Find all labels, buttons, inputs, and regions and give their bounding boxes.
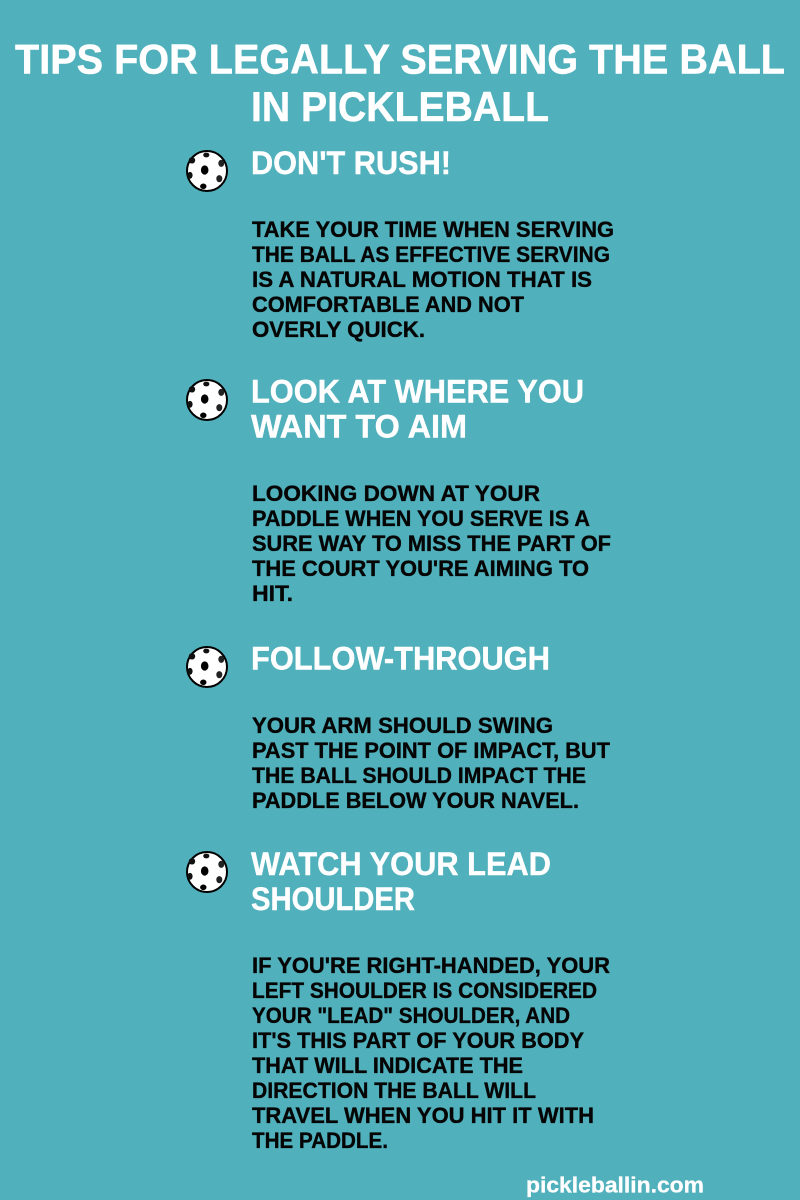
footer: source website: pickleballin.com <box>526 1172 704 1198</box>
text block: don't rush: TAKE YOUR TIME WHEN SERVING <box>252 217 614 242</box>
heading: look at where you want to aim <box>251 374 584 444</box>
text block: watch your lead shoulder: LEFT SHOULDER IS CONSIDERED <box>252 978 597 1003</box>
text block: watch your lead shoulder: DIRECTION THE BALL WILL <box>252 1078 536 1103</box>
heading: watch your lead shoulder <box>251 846 551 917</box>
text block: don't rush: IS A NATURAL MOTION THAT IS <box>252 267 592 292</box>
panel: look at where you want to aim <box>187 374 611 606</box>
panel: don't rush <box>187 145 614 342</box>
text block: look at where you want to aim: SURE WAY TO MISS THE PART OF <box>252 531 611 556</box>
icon: pickleball <box>187 647 227 687</box>
text block: watch your lead shoulder <box>252 953 610 1153</box>
text block: follow-through: PAST THE POINT OF IMPACT, BUT <box>252 738 611 763</box>
text block: look at where you want to aim: PADDLE WHEN YOU SERVE IS A <box>252 506 590 531</box>
icon: pickleball <box>187 380 227 420</box>
text block: look at where you want to aim: HIT. <box>252 581 293 606</box>
title <box>15 36 785 130</box>
text block: don't rush: THE BALL AS EFFECTIVE SERVING <box>252 242 610 267</box>
icon: pickleball <box>187 151 227 191</box>
text block: watch your lead shoulder: IT'S THIS PART OF YOUR BODY <box>252 1028 584 1053</box>
heading: don't rush: DON'T RUSH! <box>251 145 451 181</box>
text block: don't rush: COMFORTABLE AND NOT <box>252 292 525 317</box>
text block: watch your lead shoulder: THAT WILL INDICATE THE <box>252 1053 523 1078</box>
text block: look at where you want to aim: THE COURT YOU'RE AIMING TO <box>252 556 589 581</box>
text block: don't rush <box>252 217 614 342</box>
heading: look at where you want to aim: LOOK AT WHERE YOU <box>251 374 584 410</box>
panel: watch your lead shoulder <box>187 846 610 1153</box>
text block: follow-through: THE BALL SHOULD IMPACT THE <box>252 763 586 788</box>
text block: look at where you want to aim <box>252 481 611 606</box>
text block: watch your lead shoulder: TRAVEL WHEN YOU HIT IT WITH <box>252 1103 594 1128</box>
text block: watch your lead shoulder: THE PADDLE. <box>252 1128 388 1153</box>
heading: look at where you want to aim: WANT TO AIM <box>251 408 467 444</box>
text block: follow-through: PADDLE BELOW YOUR NAVEL. <box>252 788 579 813</box>
text block: look at where you want to aim: LOOKING DOWN AT YOUR <box>252 481 540 506</box>
heading: watch your lead shoulder: WATCH YOUR LEAD <box>251 846 551 882</box>
heading: follow-through: FOLLOW-THROUGH <box>251 640 550 676</box>
heading: watch your lead shoulder: SHOULDER <box>251 881 415 917</box>
text block: follow-through <box>252 713 611 813</box>
text block: watch your lead shoulder: IF YOU'RE RIGHT-HANDED, YOUR <box>252 953 610 978</box>
text block: don't rush: OVERLY QUICK. <box>252 317 425 342</box>
panel: follow-through <box>187 640 611 813</box>
icon: pickleball <box>187 852 227 892</box>
text block: watch your lead shoulder: YOUR "LEAD" SHOULDER, AND <box>252 1003 570 1028</box>
title: IN PICKLEBALL <box>251 83 549 130</box>
text block: follow-through: YOUR ARM SHOULD SWING <box>252 713 553 738</box>
